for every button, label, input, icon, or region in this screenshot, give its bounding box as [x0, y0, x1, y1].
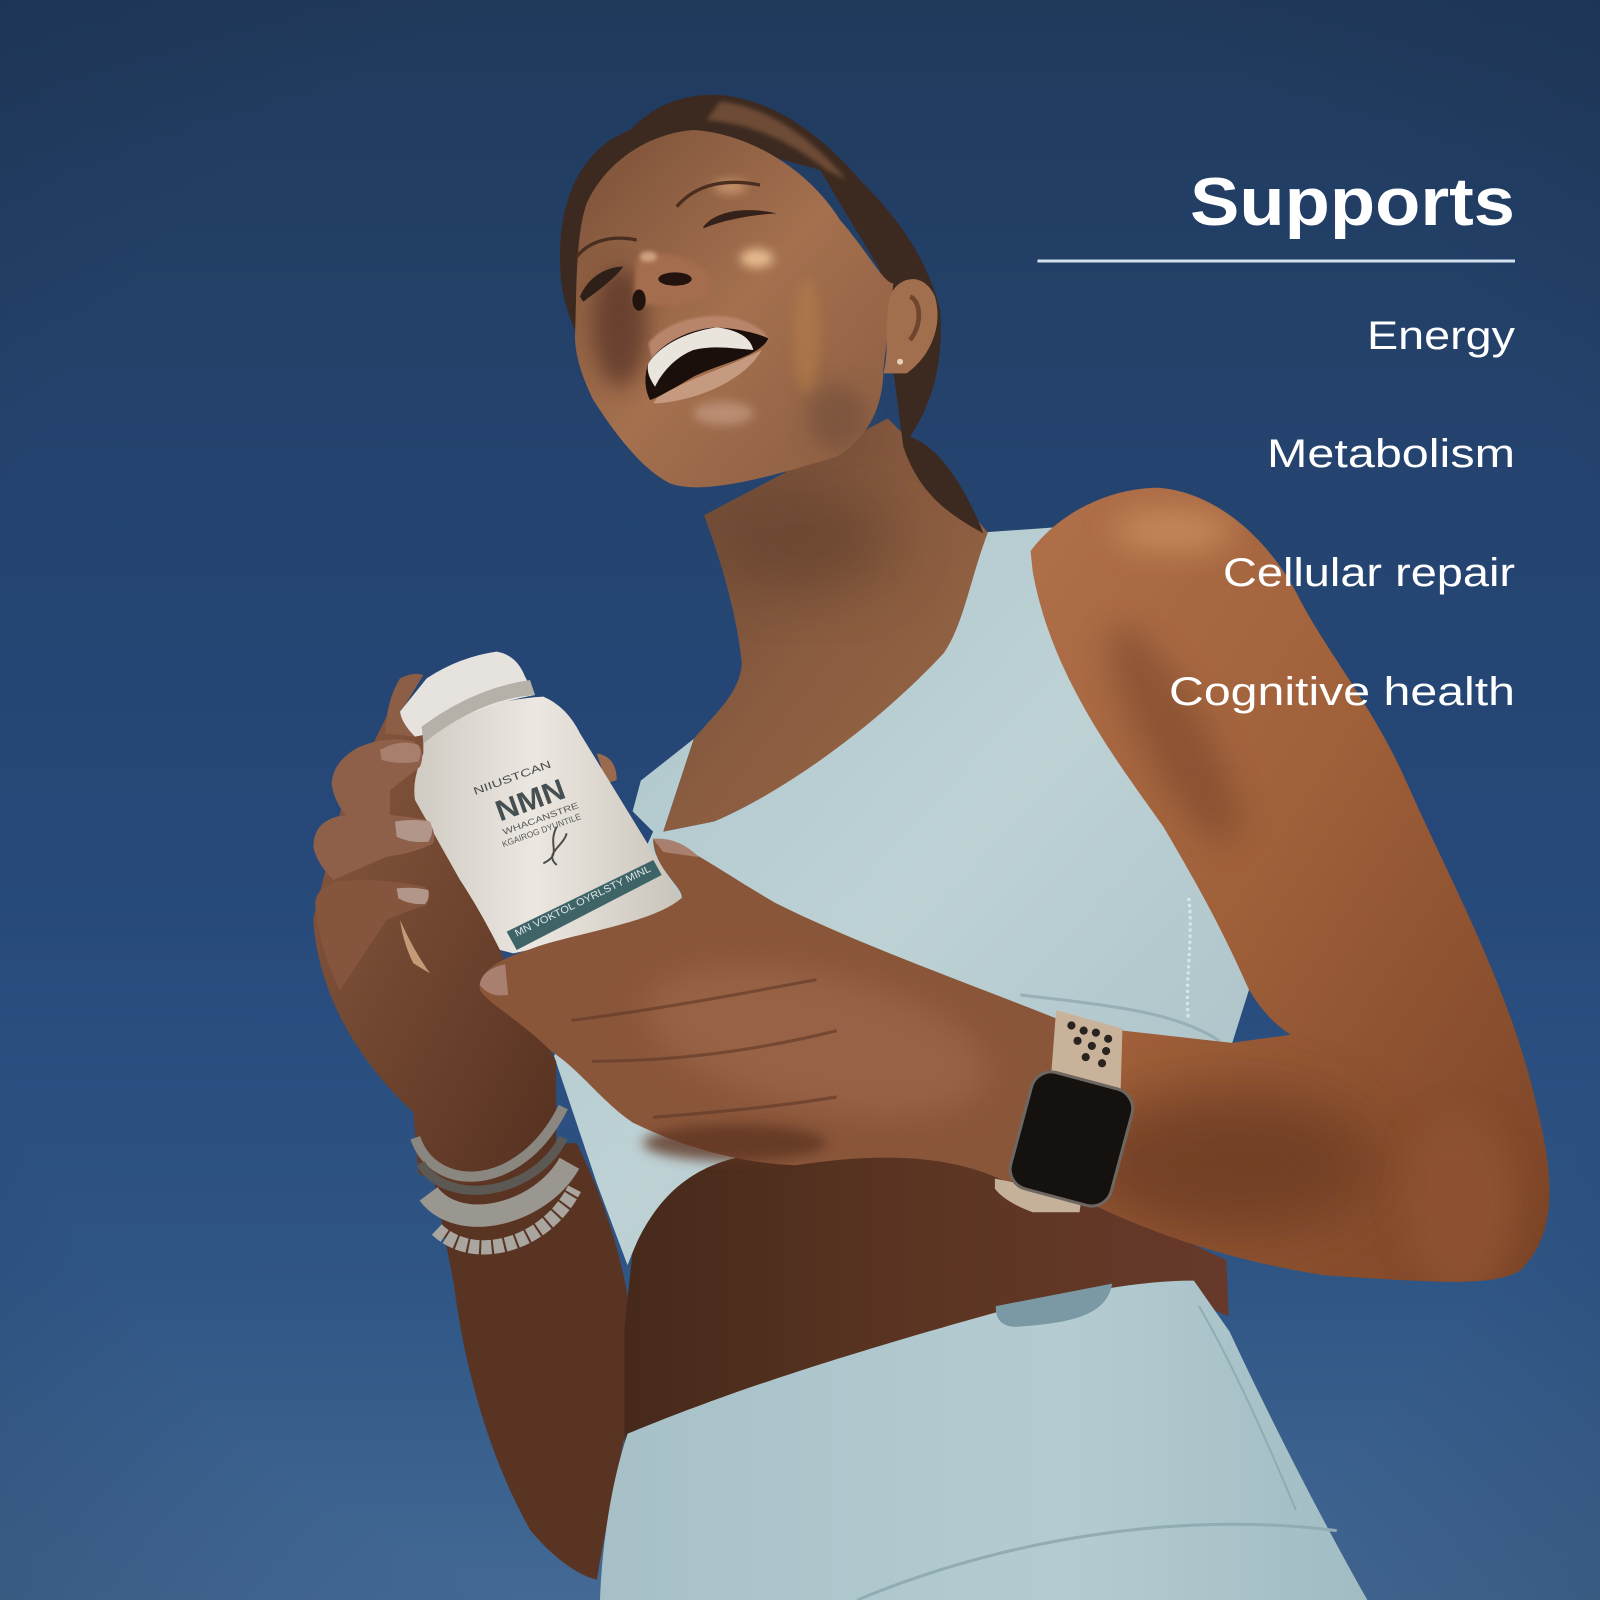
eyes and brows [577, 182, 777, 302]
bottle small text: WHACANSTRE [501, 800, 580, 837]
neck and chest [663, 418, 988, 832]
left hand: palm behind bottle [313, 704, 556, 1184]
bottle brand text: NIIUSTCAN [472, 759, 553, 798]
midriff [624, 1143, 1229, 1454]
bottle group in zoom coordinates [313, 652, 681, 990]
fingers on bottle [313, 739, 434, 990]
mouth and teeth [645, 316, 768, 403]
bracelets [415, 1107, 574, 1247]
list item: Metabolism: Metabolism [1267, 432, 1515, 476]
ear [883, 279, 938, 373]
text panel: Supports list [1038, 164, 1515, 714]
leggings [600, 1281, 1367, 1600]
figure: woman [313, 95, 1550, 1600]
bottle small text 2: KGAIROG DYUNTILE [501, 811, 583, 849]
list item: Energy: Energy [1367, 314, 1515, 358]
bottle NMN text: NMN [491, 773, 570, 828]
bottle shoulder ring [422, 680, 535, 743]
hair highlight [707, 102, 847, 180]
face [575, 130, 893, 487]
smartwatch [995, 1010, 1137, 1212]
heading: Supports [1190, 164, 1515, 240]
nose [632, 251, 712, 311]
dna icon [543, 827, 567, 865]
list item: Cognitive health: Cognitive health [1169, 670, 1515, 714]
arm: her right upper arm [429, 1143, 633, 1580]
sports bra [554, 528, 1249, 1265]
list item: Cellular repair: Cellular repair [1223, 551, 1515, 595]
divider [1038, 260, 1515, 262]
bottle band text: MN VOKTOL OYRLSTY MINL [513, 864, 653, 939]
bottle label band [507, 860, 662, 950]
arm: her left arm and shoulder [1031, 488, 1550, 1296]
bottle body [414, 697, 681, 953]
hair and ponytail [560, 95, 983, 533]
bottle cap [400, 652, 535, 737]
finger behind bottle [385, 674, 423, 737]
head [560, 95, 983, 533]
right hand holding bottle [480, 839, 1061, 1184]
